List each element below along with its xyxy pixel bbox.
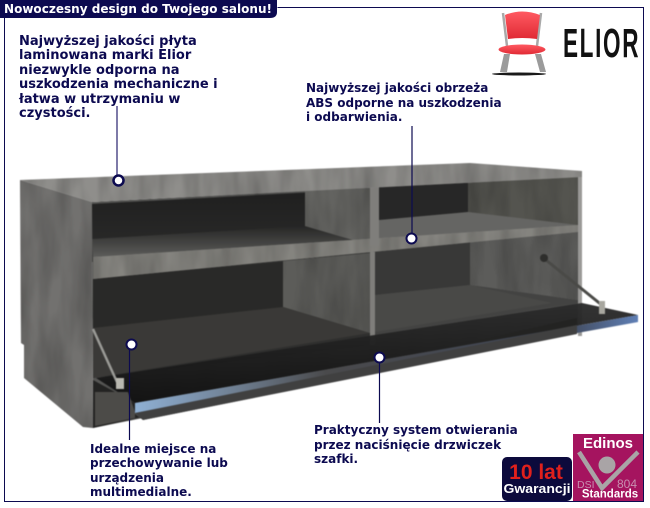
logo: ELIOR wordmark: ELIOR: [563, 21, 640, 67]
middle shelf front edge: [93, 225, 578, 279]
text: laminated board: łatwa w utrzymaniu w: [18, 92, 180, 107]
door edge strip: [135, 315, 638, 413]
text: opening system: szafki.: [314, 452, 358, 466]
text: laminated board: niezwykle odporna na: [19, 63, 180, 78]
pointer: top panel: [114, 106, 124, 186]
logo: Elior chair: [492, 12, 546, 76]
text: storage: przechowywanie lub: [90, 456, 228, 470]
text: opening system: Praktyczny system otwierania: [314, 423, 518, 437]
badge: Edinos DSI 804 standards: [573, 434, 643, 501]
header banner: Nowoczesny design do Twojego salonu!: [4, 2, 272, 16]
badge: Edinos DSI 804 standards: DSI: [577, 479, 595, 491]
badge: Edinos DSI 804 standards: Edinos: [583, 435, 633, 452]
text: ABS edging: i odbarwienia.: [306, 110, 402, 124]
tv cabinet: [20, 163, 638, 428]
badge: 10 year warranty: [502, 457, 572, 501]
right door stay: [540, 254, 605, 314]
badge: Edinos DSI 804 standards: 804: [617, 477, 637, 491]
pointer: door opening: [374, 352, 384, 423]
pointer: storage space: [126, 340, 136, 440]
text: ABS edging: Najwyższej jakości obrzeża: [306, 81, 488, 95]
badge: 10 year warranty: Gwarancji: [504, 482, 570, 496]
left door stay: [93, 329, 124, 389]
text: laminated board: czystości.: [19, 106, 90, 121]
text: storage: Idealne miejsce na: [90, 442, 216, 456]
top panel: [20, 163, 582, 202]
pointer: shelf edge: [406, 126, 416, 244]
badge: 10 year warranty: 10 lat: [509, 461, 563, 484]
text: laminated board: Najwyższej jakości płyta: [19, 34, 197, 49]
text: opening system: przez naciśnięcie drzwiczek: [314, 438, 502, 452]
left side panel: [20, 180, 93, 428]
open door: [96, 303, 638, 403]
text: laminated board: laminowana marki Elior: [19, 48, 192, 63]
text: storage: urządzenia: [90, 471, 164, 485]
cabinet right edge: [578, 176, 582, 336]
text: storage: multimedialne.: [90, 485, 192, 499]
cabinet interior: [92, 176, 582, 428]
badge: Edinos DSI 804 standards: Standards: [582, 488, 638, 500]
vertical divider: [370, 187, 379, 345]
text: ABS edging: ABS odporne na uszkodzenia: [306, 96, 502, 110]
text: laminated board: uszkodzenia mechaniczne i: [19, 77, 218, 92]
